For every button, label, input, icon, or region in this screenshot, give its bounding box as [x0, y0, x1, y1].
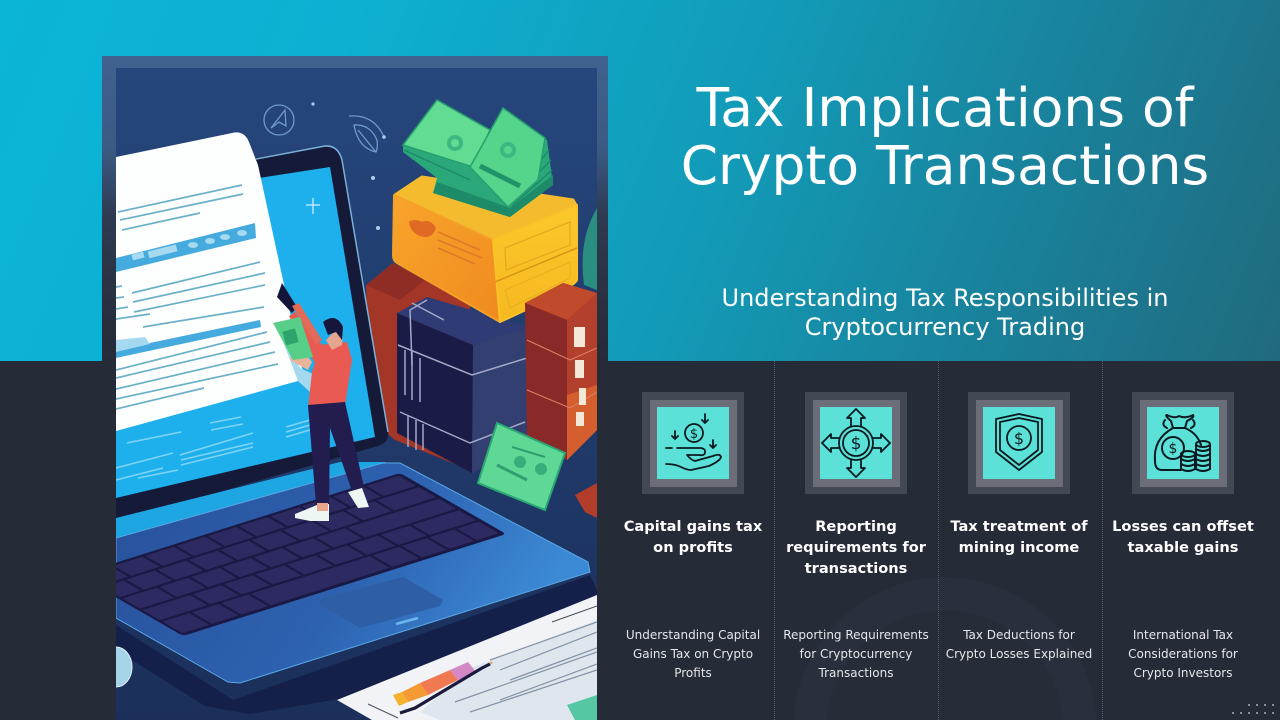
icon: money bag and coins	[1132, 392, 1234, 494]
icon: hand receiving dollar coin	[642, 392, 744, 494]
title: Crypto Transactions	[681, 134, 1209, 197]
leaf behind boxes	[583, 208, 597, 290]
on-screen text lines	[116, 417, 310, 480]
picture frame	[102, 56, 608, 720]
title	[681, 76, 1209, 197]
panel: losses offset gains	[1112, 392, 1254, 680]
heading: Tax treatment of mining income	[950, 518, 1088, 556]
person standing on keyboard	[273, 283, 369, 521]
subtitle: Understanding Tax Responsibilities in	[722, 284, 1168, 312]
description: Reporting Requirements for Cryptocurrency Transactions	[783, 628, 929, 680]
small red block	[575, 483, 597, 518]
navy box stack	[397, 297, 530, 473]
keyboard	[77, 473, 506, 636]
red cabinet	[525, 283, 597, 460]
panel: capital gains	[624, 392, 762, 680]
heading: Capital gains tax on profits	[624, 518, 762, 556]
icon: hand receiving dollar coin: $	[690, 427, 698, 442]
heading: Losses can offset taxable gains	[1112, 518, 1254, 556]
document on screen	[116, 132, 322, 431]
title: Tax Implications of	[697, 76, 1193, 139]
heading: Reporting requirements for transactions	[786, 518, 926, 577]
panel: mining income	[946, 392, 1092, 661]
stack of cash on box	[403, 100, 553, 217]
lower screen strip	[116, 462, 400, 540]
laptop deck	[116, 463, 590, 683]
background: teal gradient top band	[0, 0, 1280, 361]
printed tax form with pencil	[337, 595, 597, 720]
icon: shield with dollar	[968, 392, 1070, 494]
panel: reporting requirements	[783, 392, 929, 680]
decorative stars	[311, 102, 386, 230]
description: International Tax Considerations for Crypto Investors	[1128, 628, 1238, 680]
icon: leaf doodle	[349, 116, 384, 152]
laptop screen	[116, 167, 375, 498]
decorative dot grid	[1232, 704, 1274, 714]
loose banknote	[478, 423, 565, 510]
orange and yellow box	[393, 177, 577, 322]
coin	[100, 647, 132, 687]
description: Understanding Capital Gains Tax on Crypto Profits	[626, 628, 760, 680]
trackpad	[318, 577, 443, 628]
icon: dollar with four arrows: $	[851, 434, 861, 454]
icon: shield with dollar: $	[1014, 429, 1024, 448]
dashed divider 3	[1102, 361, 1103, 720]
red crate	[366, 263, 470, 470]
icon: compass doodle	[264, 105, 294, 135]
screen sparkle	[306, 198, 320, 214]
dashed divider 2	[938, 361, 939, 720]
subtitle: Cryptocurrency Trading	[805, 313, 1085, 341]
laptop deck shadow	[116, 575, 597, 714]
icon: dollar with four arrows	[805, 392, 907, 494]
subtitle	[722, 284, 1168, 341]
description: Tax Deductions for Crypto Losses Explained	[946, 628, 1092, 661]
background: dark lower band with faint ring	[0, 361, 1280, 720]
laptop screen bezel	[116, 147, 388, 522]
illustration: laptop, tax paperwork and cash	[116, 68, 597, 720]
icon: money bag and coins: $	[1169, 441, 1177, 457]
dashed divider 1	[774, 361, 775, 720]
